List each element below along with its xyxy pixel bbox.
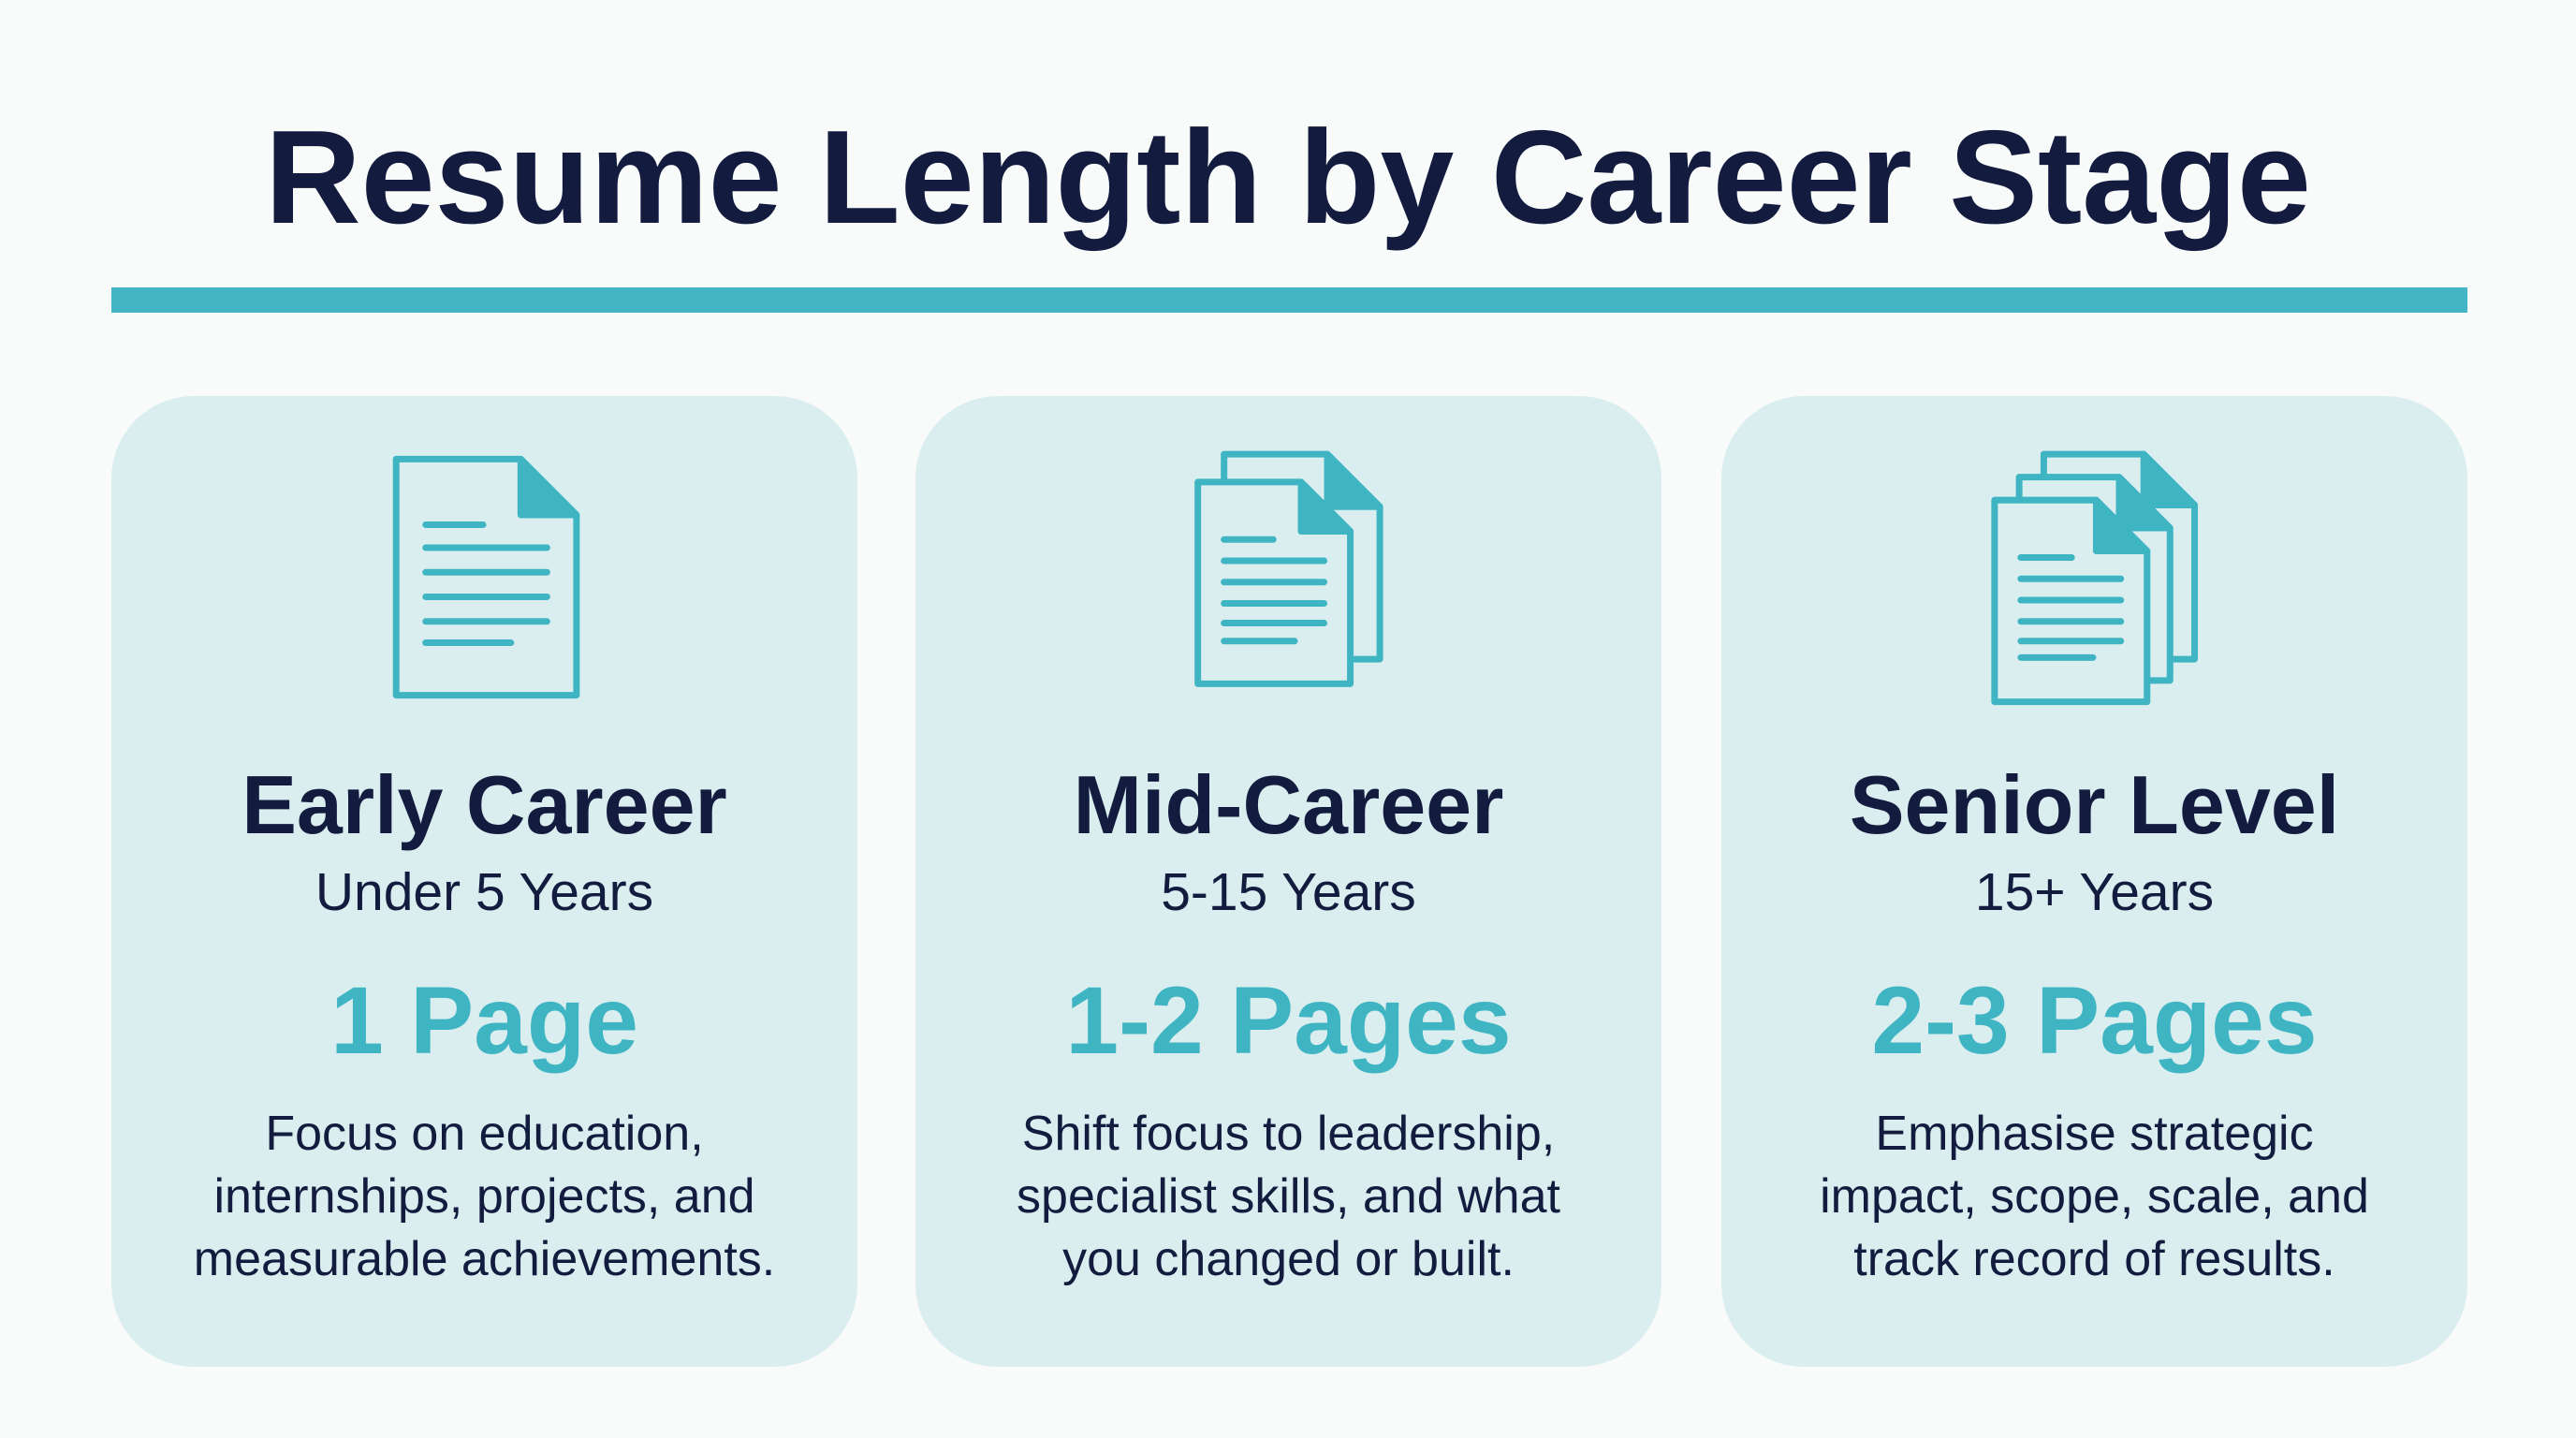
description: track record of results. [1853, 1232, 2335, 1286]
description: Focus on education, [265, 1107, 704, 1161]
description: measurable achievements. [194, 1232, 775, 1286]
description: internships, projects, and [213, 1169, 755, 1224]
text: senior level [1820, 758, 2369, 1286]
text: mid-career [1017, 758, 1560, 1286]
panel: mid-career [915, 396, 1661, 1367]
description: impact, scope, scale, and [1820, 1169, 2369, 1224]
heading: Early Career [242, 758, 727, 851]
description: specialist skills, and what [1017, 1169, 1560, 1224]
description [194, 1107, 775, 1286]
years: 15+ Years [1975, 862, 2214, 922]
title: Resume Length by Career Stage [265, 103, 2311, 252]
heading: Mid-Career [1074, 758, 1503, 851]
years: Under 5 Years [315, 862, 653, 922]
icon: single document [396, 459, 577, 696]
text: early career [194, 758, 775, 1286]
icon: three documents [1995, 454, 2195, 702]
description: Shift focus to leadership, [1022, 1107, 1555, 1161]
icon: two documents [1198, 454, 1380, 683]
page count: 1-2 Pages [1065, 967, 1512, 1074]
description [1017, 1107, 1560, 1286]
description: Emphasise strategic [1875, 1107, 2314, 1161]
years: 5-15 Years [1161, 862, 1416, 922]
description [1820, 1107, 2369, 1286]
panel: early career [111, 396, 857, 1367]
page count: 2-3 Pages [1871, 967, 2318, 1074]
description: you changed or built. [1062, 1232, 1515, 1286]
heading: Senior Level [1850, 758, 2339, 851]
page count: 1 Page [330, 967, 638, 1074]
panel: senior level [1721, 396, 2467, 1367]
